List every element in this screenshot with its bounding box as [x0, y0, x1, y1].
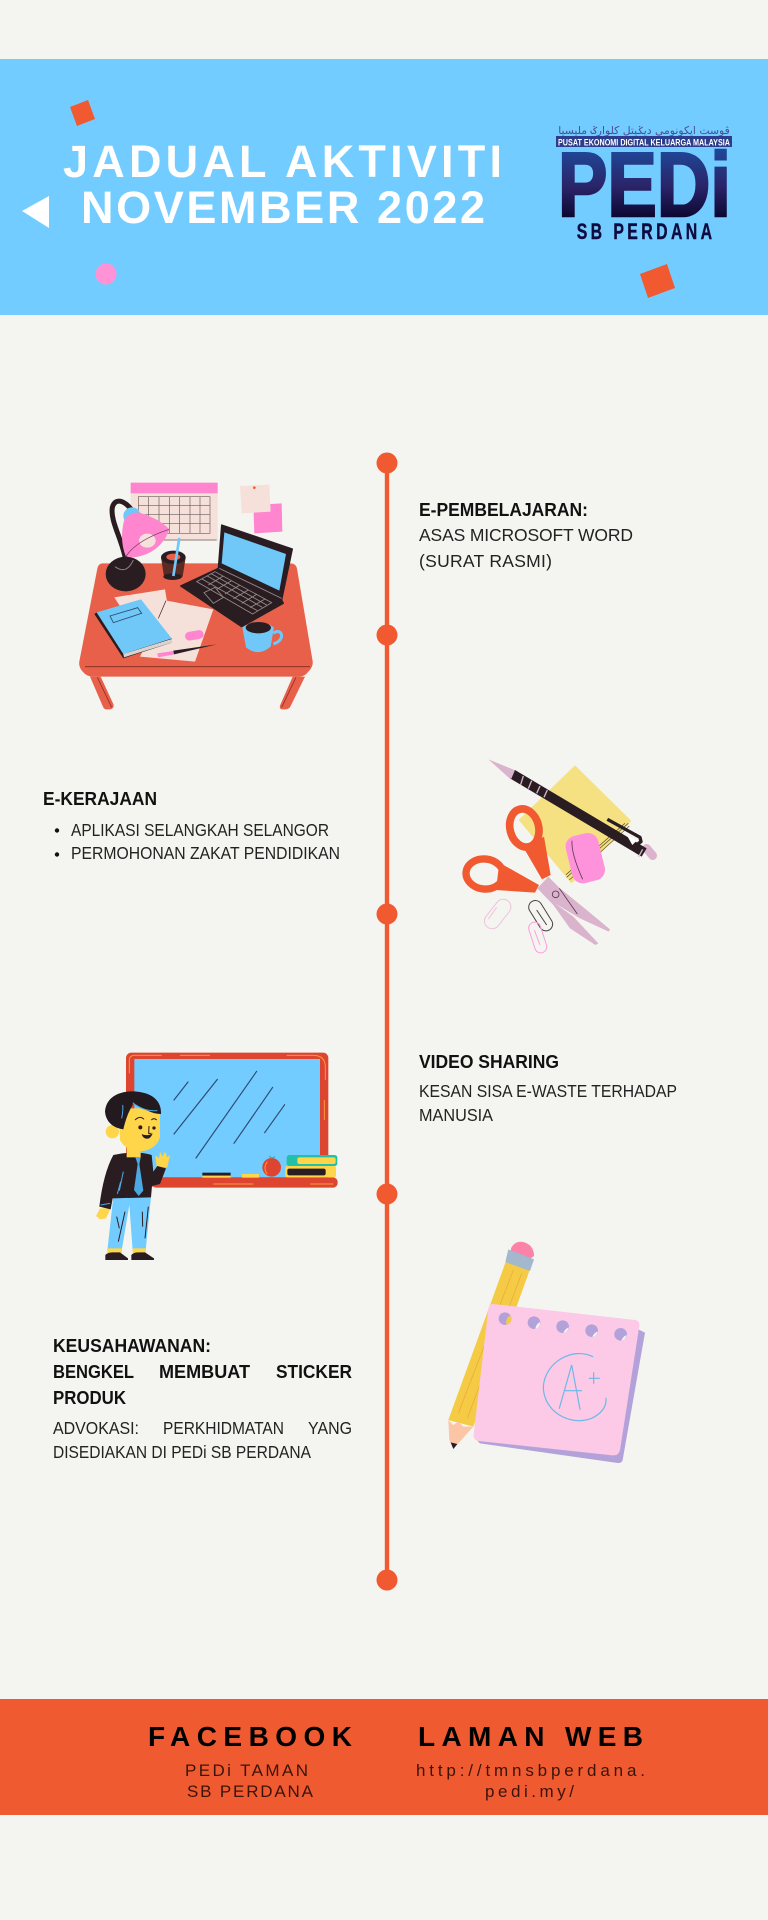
footer column: facebook: PEDi TAMAN [185, 1761, 308, 1780]
text block: e-kerajaan: PERMOHONAN ZAKAT PENDIDIKAN [71, 843, 340, 863]
footer column: facebook [148, 1721, 352, 1801]
PEDi logo: PEDi [558, 135, 731, 236]
timeline [376, 452, 398, 1590]
pink note [474, 1304, 639, 1455]
calendar [131, 483, 218, 541]
text block: keusahawanan: MEMBUAT [159, 1362, 250, 1382]
decoration: pink dot [96, 264, 116, 284]
footer column: facebook: FACEBOOK [148, 1721, 352, 1752]
desk lamp [106, 501, 169, 591]
PEDi logo: ڤوست ايکونومي ديݢيتل کلوارݢ مليسيا [558, 124, 730, 137]
text block: e-pembelajaran: ASAS MICROSOFT WORD [419, 525, 633, 545]
text block: keusahawanan: ADVOKASI: [53, 1418, 139, 1438]
pencil [448, 1242, 534, 1449]
text block: keusahawanan [53, 1336, 352, 1462]
footer column: laman web: http://tmnsbperdana. [416, 1761, 645, 1780]
desk [79, 563, 313, 709]
text block: e-pembelajaran [419, 500, 633, 571]
pen cup [161, 538, 186, 580]
illustration: pencil and graded note [448, 1242, 645, 1463]
text block: e-kerajaan [43, 789, 340, 863]
chalk, eraser, apple, books [202, 1155, 337, 1178]
PEDi logo: SB PERDANA [577, 221, 712, 245]
footer column: laman web [416, 1721, 645, 1801]
text block: keusahawanan: KEUSAHAWANAN: [53, 1336, 211, 1356]
yellow notepad [520, 767, 630, 882]
illustration: boy at chalkboard [96, 1053, 338, 1260]
chalkboard [126, 1053, 338, 1188]
purple backing sheet [475, 1329, 645, 1463]
decoration: white triangle [22, 196, 49, 228]
title: NOVEMBER 2022 [81, 182, 485, 233]
decoration: orange square bottom right [640, 264, 675, 298]
footer column: facebook: SB PERDANA [187, 1782, 314, 1801]
pen [488, 759, 653, 857]
header banner [0, 59, 768, 315]
text block: e-kerajaan: APLIKASI SELANGKAH SELANGOR [71, 820, 329, 840]
illustration: desk with laptop [79, 483, 313, 709]
text block: keusahawanan: PRODUK [53, 1388, 126, 1408]
paper clips [481, 896, 555, 954]
text block: keusahawanan: YANG [308, 1418, 352, 1438]
text block: e-kerajaan: E-KERAJAAN [43, 789, 157, 809]
pen and eraser [157, 629, 217, 657]
text block: keusahawanan: DISEDIAKAN DI PEDi SB PERDANA [53, 1442, 311, 1462]
text block: keusahawanan: PERKHIDMATAN [163, 1418, 284, 1438]
coffee mug [242, 622, 282, 652]
text block: video sharing [419, 1052, 677, 1125]
text block: video sharing: KESAN SISA E-WASTE TERHADAP [419, 1081, 677, 1101]
text block: e-pembelajaran: E-PEMBELAJARAN: [419, 500, 588, 520]
title [63, 136, 502, 233]
text block: keusahawanan: BENGKEL [53, 1362, 134, 1382]
footer column: laman web: pedi.my/ [485, 1782, 574, 1801]
laptop [181, 525, 292, 627]
sticky notes [240, 485, 282, 533]
text block: keusahawanan: STICKER [276, 1362, 352, 1382]
text block: e-pembelajaran: (SURAT RASMI) [419, 551, 552, 571]
papers [114, 589, 213, 662]
footer column: laman web: LAMAN WEB [418, 1721, 643, 1752]
title: JADUAL AKTIVITI [63, 136, 502, 187]
text block: video sharing: VIDEO SHARING [419, 1052, 559, 1072]
notebook [94, 599, 172, 658]
pink eraser [563, 831, 607, 886]
text block: video sharing: MANUSIA [419, 1105, 493, 1125]
footer band [0, 1699, 768, 1815]
scissors [465, 806, 610, 945]
boy [96, 1091, 170, 1260]
decoration: orange square top left [70, 100, 95, 126]
illustration: scissors and stationery [465, 759, 653, 954]
